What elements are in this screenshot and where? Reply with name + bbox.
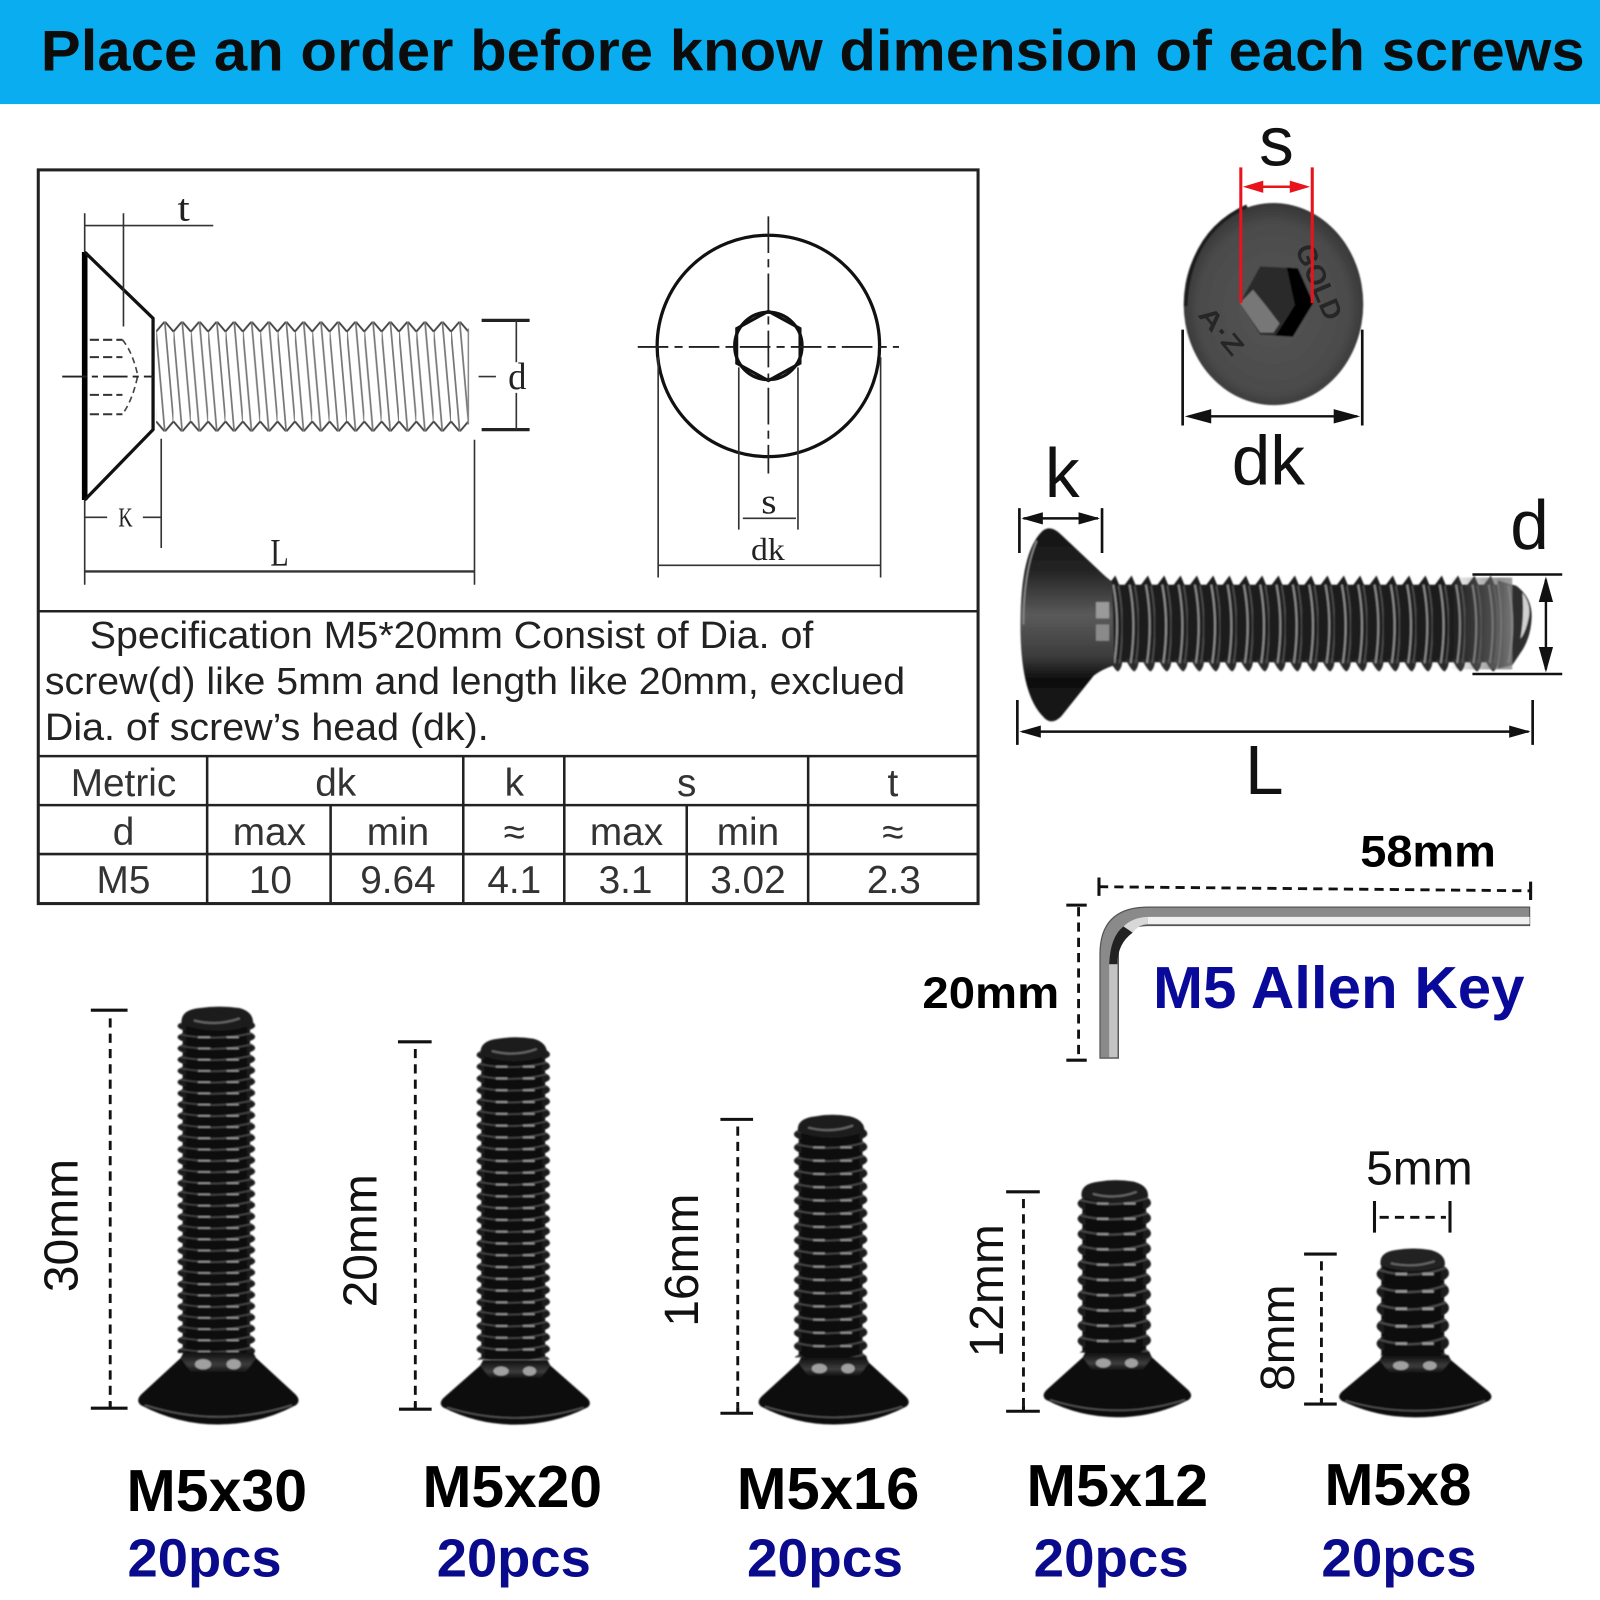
icon: allen key xyxy=(1100,907,1530,1058)
dimension table values: 10 xyxy=(249,859,292,902)
label t: t xyxy=(178,187,190,229)
dimension line: 30mm xyxy=(36,1159,89,1292)
header banner xyxy=(0,0,1600,104)
dimension: k: k xyxy=(1045,434,1080,512)
label s: s xyxy=(761,481,777,521)
dimension table values: Metric xyxy=(71,762,176,805)
dimension table values: min xyxy=(717,811,779,854)
screw M5x8 xyxy=(1252,1143,1491,1589)
screw M5x12 xyxy=(961,1180,1208,1589)
screw M5x16 xyxy=(656,1115,919,1589)
label: M5x8 xyxy=(1324,1451,1471,1518)
photo: screw xyxy=(138,1007,299,1424)
label d: d xyxy=(508,356,527,398)
dimension table values: ≈ xyxy=(882,811,903,854)
photo: screw head with hex socket: GOLD xyxy=(1289,239,1349,325)
quantity: 20pcs xyxy=(128,1529,282,1589)
dimension: k xyxy=(1019,434,1102,553)
dimension: 20mm: 20mm xyxy=(922,967,1059,1018)
dimension table values: max xyxy=(590,811,663,854)
photo: screw xyxy=(441,1037,590,1425)
dimension line xyxy=(656,1119,753,1413)
label: M5x20 xyxy=(422,1453,602,1520)
quantity: 20pcs xyxy=(747,1529,903,1589)
dimension table values: 2.3 xyxy=(867,859,921,902)
photo: screw head with hex socket xyxy=(1184,203,1363,405)
dimension line: diameter xyxy=(1366,1143,1473,1233)
screw M5x20 xyxy=(335,1037,602,1589)
dimension table values: min xyxy=(367,811,429,854)
dimension table values: 3.02 xyxy=(710,859,786,902)
quantity: 20pcs xyxy=(1321,1529,1477,1589)
dimension table values: ≈ xyxy=(504,811,525,854)
label: M5x30 xyxy=(127,1457,307,1524)
dimension table values xyxy=(71,762,921,902)
label: M5x12 xyxy=(1027,1452,1208,1519)
quantity: 20pcs xyxy=(1034,1529,1189,1589)
specification paragraph xyxy=(45,614,905,748)
dimension table values: max xyxy=(233,811,306,854)
specification paragraph: Dia. of screw’s head (dk). xyxy=(45,706,489,748)
dimension table values: 4.1 xyxy=(487,859,541,902)
panel: specification table box xyxy=(38,170,978,904)
dimension line: 16mm xyxy=(656,1194,709,1327)
dimension: 58mm xyxy=(1099,825,1531,900)
dimension line xyxy=(335,1042,432,1409)
label: M5 Allen Key: M5 Allen Key xyxy=(1153,954,1525,1021)
dimension line: length: 8mm xyxy=(1252,1284,1305,1391)
specification paragraph: screw(d) like 5mm and length like 20mm, exclued xyxy=(45,660,905,702)
dimension: L: L xyxy=(1245,731,1284,809)
screw M5x30 xyxy=(36,1007,307,1589)
dimension table values: 3.1 xyxy=(599,859,652,902)
dimension: dk xyxy=(1183,330,1362,500)
photo: screw side view xyxy=(1020,528,1532,721)
dimension line: 12mm xyxy=(961,1224,1014,1357)
label K: K xyxy=(118,502,133,533)
label: M5x16 xyxy=(737,1455,919,1522)
dimension line: 20mm xyxy=(335,1174,388,1307)
title: Place an order before know dimension of each screws xyxy=(41,19,1585,83)
dimension table values: t xyxy=(887,762,898,805)
technical drawing: side view of screw xyxy=(62,187,530,585)
dimension table values: k xyxy=(505,762,525,805)
dimension table values: M5 xyxy=(97,859,150,902)
photo: screw xyxy=(759,1115,909,1425)
dimension line: length xyxy=(1252,1254,1337,1404)
engraved marks: A·Z xyxy=(1192,301,1249,361)
dimension: L xyxy=(1017,700,1533,809)
dimension table values: d xyxy=(113,811,134,854)
allen key group xyxy=(922,825,1531,1060)
dimension: 20mm xyxy=(922,905,1087,1060)
dimension line xyxy=(36,1010,128,1408)
dimension table values: 9.64 xyxy=(360,859,436,902)
dimension: s xyxy=(1241,102,1312,303)
label dk: dk xyxy=(751,532,785,567)
quantity: 20pcs xyxy=(437,1529,591,1589)
dimension table values: s xyxy=(677,762,696,805)
photo: screw xyxy=(1339,1248,1491,1417)
dimension line: diameter: 5mm xyxy=(1366,1143,1473,1196)
dimension table values: dk xyxy=(315,762,357,805)
dimension: s: s xyxy=(1259,102,1294,180)
dimension: d: d xyxy=(1510,486,1549,564)
dimension: d xyxy=(1472,486,1562,674)
dimension: dk: dk xyxy=(1232,422,1305,500)
dimension: 58mm: 58mm xyxy=(1360,825,1496,876)
dimension line xyxy=(961,1192,1040,1411)
label L: L xyxy=(270,531,289,574)
technical drawing: head view of screw xyxy=(638,216,899,578)
specification paragraph: Specification M5*20mm Consist of Dia. of xyxy=(90,614,814,656)
photo: screw xyxy=(1044,1180,1191,1417)
